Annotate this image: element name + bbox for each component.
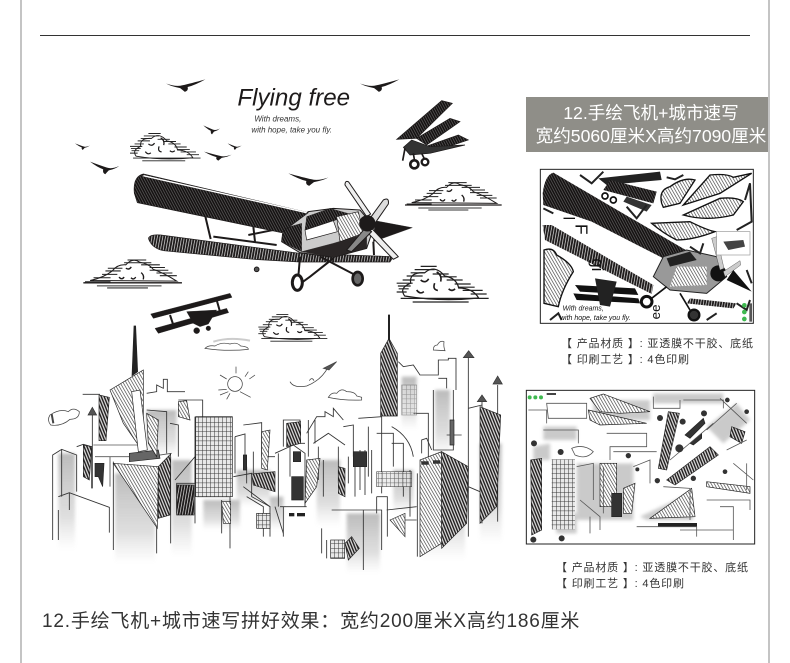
birds (75, 79, 399, 186)
sheet grid tower (552, 459, 575, 529)
spire tower (388, 315, 390, 342)
clouds (83, 134, 502, 302)
sticker sheet 1: aircraft (540, 169, 753, 323)
sheet marks (528, 395, 543, 399)
tagline: With dreams, (254, 115, 301, 124)
register marks (742, 303, 747, 321)
bottom size note: 12.手绘飞机+城市速写拼好效果：宽约200厘米X高约186厘米 (42, 611, 580, 632)
grid tower (196, 417, 232, 497)
sheet wing (543, 173, 700, 258)
banner (526, 97, 768, 152)
top rule (40, 35, 750, 36)
tagline: with hope, take you fly. (251, 126, 332, 135)
inset thumbnail (717, 232, 750, 255)
heading: Flying free: Flying free (237, 85, 350, 112)
block with hatched face (113, 463, 158, 528)
struts (205, 215, 374, 283)
lower wing (148, 235, 393, 262)
upper wing (134, 174, 308, 233)
background outlines (53, 357, 498, 570)
sticker sheet 2: city (526, 390, 755, 544)
left page edge (20, 0, 22, 663)
central towers (262, 430, 270, 470)
caption: sheet 1 specs: 【 印刷工艺 】: 4色印刷 (561, 354, 690, 366)
caption: sheet 1 specs (561, 338, 754, 366)
caption: sheet 2 specs: 【 印刷工艺 】: 4色印刷 (556, 578, 685, 590)
sheet shading (533, 393, 750, 533)
striped low block (177, 485, 194, 515)
sticker sheet 1: aircraft: gi (588, 258, 607, 271)
banner title: 12.手绘飞机+城市速写 (563, 103, 739, 123)
banner size: 宽约5060厘米X高约7090厘米 (536, 126, 767, 146)
caption: sheet 2 specs: 【 产品材质 】: 亚透膜不干胶、底纸 (556, 562, 749, 574)
propeller (345, 181, 371, 217)
sheet hatched towers (531, 394, 750, 535)
sheet caption: with hope, take you fly. (560, 315, 631, 322)
sticker sheet 1: aircraft: ee (648, 305, 663, 319)
cloud over the city (258, 314, 327, 341)
sheet letters: F (571, 224, 591, 235)
right page edge (768, 0, 770, 663)
twisted tower (132, 326, 138, 376)
sheet birds (543, 172, 752, 320)
grey pencil shading (58, 377, 502, 573)
caption: sheet 1 specs: 【 产品材质 】: 亚透膜不干胶、底纸 (561, 338, 754, 350)
doodles: cloud, light bulb, paper plane, balloon (48, 339, 445, 425)
small triplane (397, 101, 468, 168)
sheet dots (530, 398, 749, 543)
arrow tips (88, 351, 502, 415)
right hatched towers (420, 452, 442, 557)
wheels (292, 275, 302, 290)
window blocks (257, 513, 270, 528)
sticker sheet 1: aircraft: l (559, 217, 576, 220)
sheet caption: With dreams, (563, 306, 604, 313)
sheet outlines (528, 397, 753, 540)
tail fin (373, 221, 412, 242)
sheet black plane (575, 285, 638, 295)
sketched city skyline (48, 315, 502, 573)
sheet small plane (598, 172, 662, 185)
hatched building fronts (83, 315, 501, 560)
caption: sheet 2 specs (556, 562, 749, 590)
sheet fuselage (653, 250, 727, 293)
fuselage (282, 208, 374, 257)
black biplane (151, 293, 232, 334)
sheet clouds (544, 173, 752, 307)
main biplane (134, 174, 412, 290)
main illustration: aircraft, clouds and birds (75, 79, 502, 302)
